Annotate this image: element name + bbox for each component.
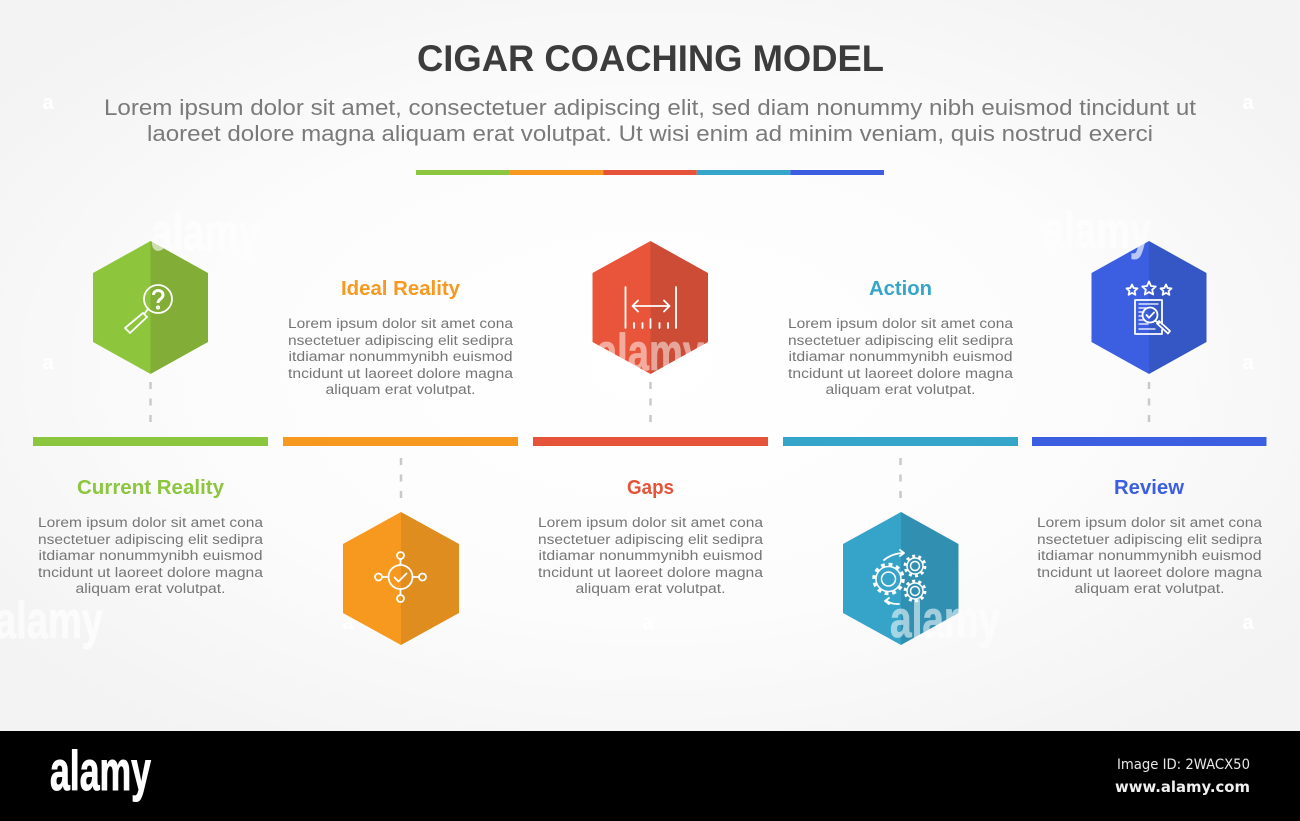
watermarks bbox=[0, 202, 1151, 650]
icon: width measurement bbox=[626, 287, 676, 328]
icon: gears with arrows bbox=[874, 550, 925, 604]
footer band bbox=[0, 731, 1300, 821]
description bbox=[38, 515, 264, 596]
small watermark marks: a bbox=[942, 92, 954, 114]
small watermark marks: a bbox=[342, 612, 354, 634]
panel: action bbox=[783, 278, 1018, 645]
connector bbox=[1148, 382, 1150, 424]
description bbox=[538, 515, 764, 596]
hexagon: teal bbox=[843, 512, 958, 645]
description: itdiamar nonummynibh euismod bbox=[1038, 548, 1262, 563]
heading: Gaps bbox=[627, 477, 674, 499]
heading: Current Reality bbox=[77, 477, 225, 499]
description: itdiamar nonummynibh euismod bbox=[538, 548, 762, 563]
intro paragraph bbox=[104, 95, 1197, 146]
description: nsectetuer adipiscing elit sedipra bbox=[288, 333, 514, 348]
description: tncidunt ut laoreet dolore magna bbox=[788, 366, 1014, 381]
description bbox=[788, 316, 1014, 397]
small watermark marks: a bbox=[1242, 92, 1254, 114]
timeline bar bbox=[283, 437, 518, 446]
description: aliquam erat volutpat. bbox=[326, 382, 476, 397]
description bbox=[288, 316, 514, 397]
small watermark marks bbox=[42, 92, 1254, 634]
timeline bar bbox=[533, 437, 768, 446]
heading: Action bbox=[869, 278, 932, 300]
timeline bar bbox=[1032, 437, 1266, 446]
hexagon: orange bbox=[343, 512, 459, 645]
connector bbox=[899, 458, 902, 500]
timeline bar bbox=[783, 437, 1018, 446]
description: tncidunt ut laoreet dolore magna bbox=[38, 565, 264, 580]
description: tncidunt ut laoreet dolore magna bbox=[288, 366, 514, 381]
icon: magnifier with question mark bbox=[125, 285, 172, 333]
description: Lorem ipsum dolor sit amet cona bbox=[538, 515, 764, 530]
small watermark marks: a bbox=[42, 352, 54, 374]
small watermark marks: a bbox=[1242, 612, 1254, 634]
heading: Review bbox=[1114, 477, 1184, 499]
description: nsectetuer adipiscing elit sedipra bbox=[538, 532, 764, 547]
description: tncidunt ut laoreet dolore magna bbox=[1037, 565, 1263, 580]
description: Lorem ipsum dolor sit amet cona bbox=[288, 316, 514, 331]
watermarks: alamy bbox=[890, 591, 1000, 649]
description: Lorem ipsum dolor sit amet cona bbox=[38, 515, 264, 530]
description: aliquam erat volutpat. bbox=[576, 581, 726, 596]
description: aliquam erat volutpat. bbox=[76, 581, 226, 596]
description: nsectetuer adipiscing elit sedipra bbox=[1037, 532, 1263, 547]
watermarks: alamy bbox=[151, 204, 260, 262]
description: nsectetuer adipiscing elit sedipra bbox=[788, 333, 1014, 348]
panel: review bbox=[1032, 241, 1266, 596]
intro paragraph: laoreet dolore magna aliquam erat volutpat. Ut wisi enim ad minim veniam, quis nostrud exerci bbox=[147, 121, 1153, 146]
hexagon: green bbox=[93, 241, 208, 374]
website: www.alamy.com bbox=[1115, 778, 1250, 796]
panel: current reality bbox=[33, 241, 268, 596]
hexagon: red bbox=[592, 241, 708, 374]
small watermark marks: a bbox=[342, 92, 354, 114]
description: nsectetuer adipiscing elit sedipra bbox=[38, 532, 264, 547]
description: aliquam erat volutpat. bbox=[1074, 581, 1224, 596]
panel: gaps bbox=[533, 241, 768, 596]
description: itdiamar nonummynibh euismod bbox=[788, 349, 1012, 364]
small watermark marks: a bbox=[42, 92, 54, 114]
image id: Image ID: 2WACX50 bbox=[1117, 757, 1250, 773]
small watermark marks: a bbox=[642, 92, 654, 114]
title: CIGAR COACHING MODEL bbox=[417, 38, 884, 79]
description: tncidunt ut laoreet dolore magna bbox=[538, 565, 764, 580]
small watermark marks: a bbox=[342, 352, 354, 374]
watermarks: alamy bbox=[596, 324, 704, 382]
timeline bar bbox=[33, 437, 268, 446]
connector bbox=[400, 458, 402, 500]
panel: ideal reality bbox=[283, 278, 518, 645]
hexagon: blue bbox=[1092, 241, 1206, 374]
small watermark marks: a bbox=[1242, 352, 1254, 374]
connector bbox=[149, 382, 152, 424]
footer logo: alamy bbox=[50, 739, 151, 802]
description: aliquam erat volutpat. bbox=[826, 382, 976, 397]
multicolour title rule bbox=[416, 170, 884, 175]
description: Lorem ipsum dolor sit amet cona bbox=[788, 316, 1014, 331]
description bbox=[1037, 515, 1263, 596]
icon: hub with check mark bbox=[375, 552, 426, 602]
description: itdiamar nonummynibh euismod bbox=[288, 349, 512, 364]
description: itdiamar nonummynibh euismod bbox=[38, 548, 262, 563]
description: Lorem ipsum dolor sit amet cona bbox=[1037, 515, 1263, 530]
small watermark marks: a bbox=[642, 612, 654, 634]
intro paragraph: Lorem ipsum dolor sit amet, consectetuer adipiscing elit, sed diam nonummy nibh euismod tincidunt ut bbox=[104, 95, 1197, 120]
watermarks: alamy bbox=[1043, 202, 1151, 260]
small watermark marks: a bbox=[942, 352, 954, 374]
icon: document review with stars bbox=[1126, 282, 1172, 334]
heading: Ideal Reality bbox=[341, 278, 461, 300]
connector bbox=[649, 382, 652, 424]
